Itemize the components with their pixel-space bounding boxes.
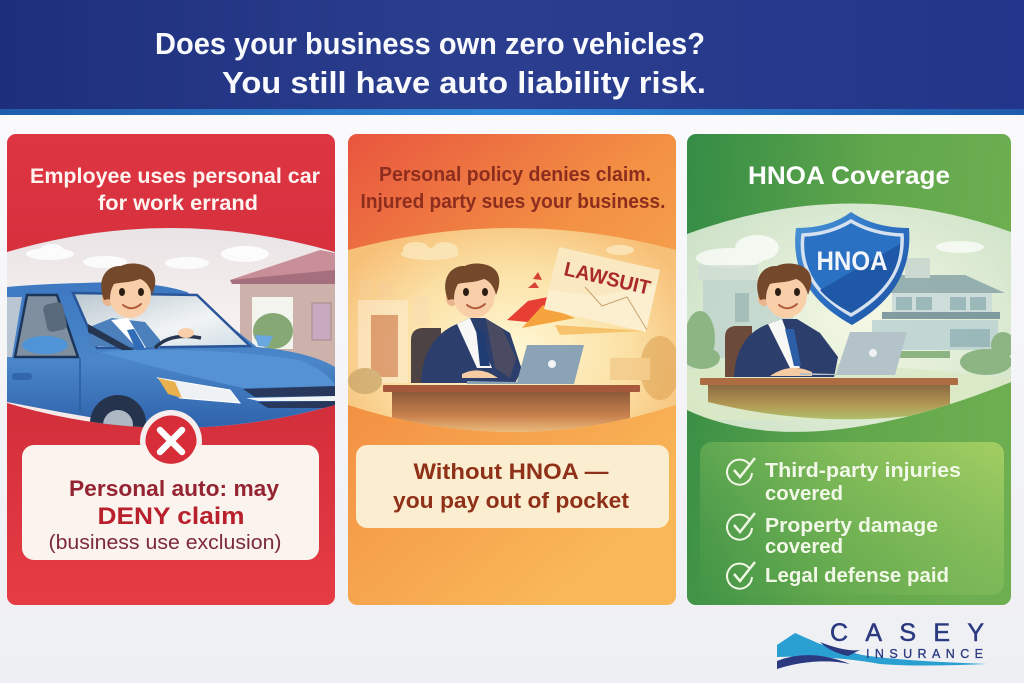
panel heading: for work errand (98, 192, 258, 215)
callout: deny claim: (business use exclusion) (48, 532, 282, 554)
lawn (687, 363, 1011, 420)
scene: office building (684, 200, 1015, 440)
desk top (700, 378, 958, 385)
title: You still have auto liability risk. (222, 66, 706, 100)
logo: Casey Insurance (777, 619, 987, 669)
driver (88, 264, 201, 350)
scene: office with lawsuit (348, 228, 676, 432)
desk top (383, 385, 640, 392)
house (230, 250, 335, 368)
grille (243, 386, 335, 397)
benefit: legal defense: Legal defense paid (765, 565, 949, 587)
windshield (73, 293, 250, 348)
logo: Casey Insurance: CASEY (830, 619, 984, 647)
clouds (26, 244, 269, 269)
businessman at desk (725, 264, 907, 377)
benefit: third-party injuries (727, 458, 961, 505)
background building (348, 280, 680, 400)
envelope: lawsuit (507, 247, 660, 335)
door line and handle (79, 358, 81, 412)
title: Does your business own zero vehicles? (155, 27, 705, 61)
shield badge (795, 212, 909, 325)
panel heading: HNOA Coverage (748, 162, 950, 190)
shrubs (684, 311, 1015, 375)
callout: deny claim: DENY claim (98, 503, 244, 530)
panel heading: Injured party sues your business. (360, 191, 666, 213)
desk body (708, 385, 950, 419)
mirror (22, 336, 68, 354)
clouds (696, 235, 984, 268)
lawsuit text: LAWSUIT (562, 258, 653, 300)
panel: lawsuit (348, 134, 680, 605)
businessman at desk (411, 264, 584, 384)
benefit: third-party injuries: Third-party injuries (765, 460, 961, 482)
side window (7, 297, 22, 357)
panel heading: Employee uses personal car (30, 165, 320, 188)
callout: out of pocket (356, 445, 669, 528)
panel: employee personal car (7, 134, 335, 605)
benefit: property damage: Property damage (765, 515, 938, 537)
callout: out of pocket: Without HNOA — (414, 459, 608, 484)
scene: car and driver (7, 228, 335, 428)
benefits box (700, 442, 1004, 595)
desk body (392, 392, 630, 432)
benefit: property damage (727, 513, 938, 558)
benefit: third-party injuries: covered (765, 483, 843, 505)
callout: out of pocket: you pay out of pocket (393, 488, 630, 513)
header banner (0, 0, 1024, 115)
shield text: HNOA (816, 246, 888, 276)
logo: Casey Insurance: INSURANCE (866, 647, 983, 661)
denied icon (140, 410, 202, 472)
benefit: legal defense (727, 562, 949, 589)
left building (698, 265, 793, 358)
callout: deny claim (22, 445, 319, 560)
panel heading: Personal policy denies claim. (379, 164, 651, 186)
front wheel (90, 395, 146, 428)
right building (872, 258, 1005, 350)
car body (7, 282, 335, 428)
clouds (401, 242, 634, 260)
panel: HNOA coverage (684, 134, 1015, 605)
benefit: property damage: covered (765, 536, 843, 558)
callout: deny claim: Personal auto: may (69, 476, 280, 501)
headlight (158, 378, 240, 403)
